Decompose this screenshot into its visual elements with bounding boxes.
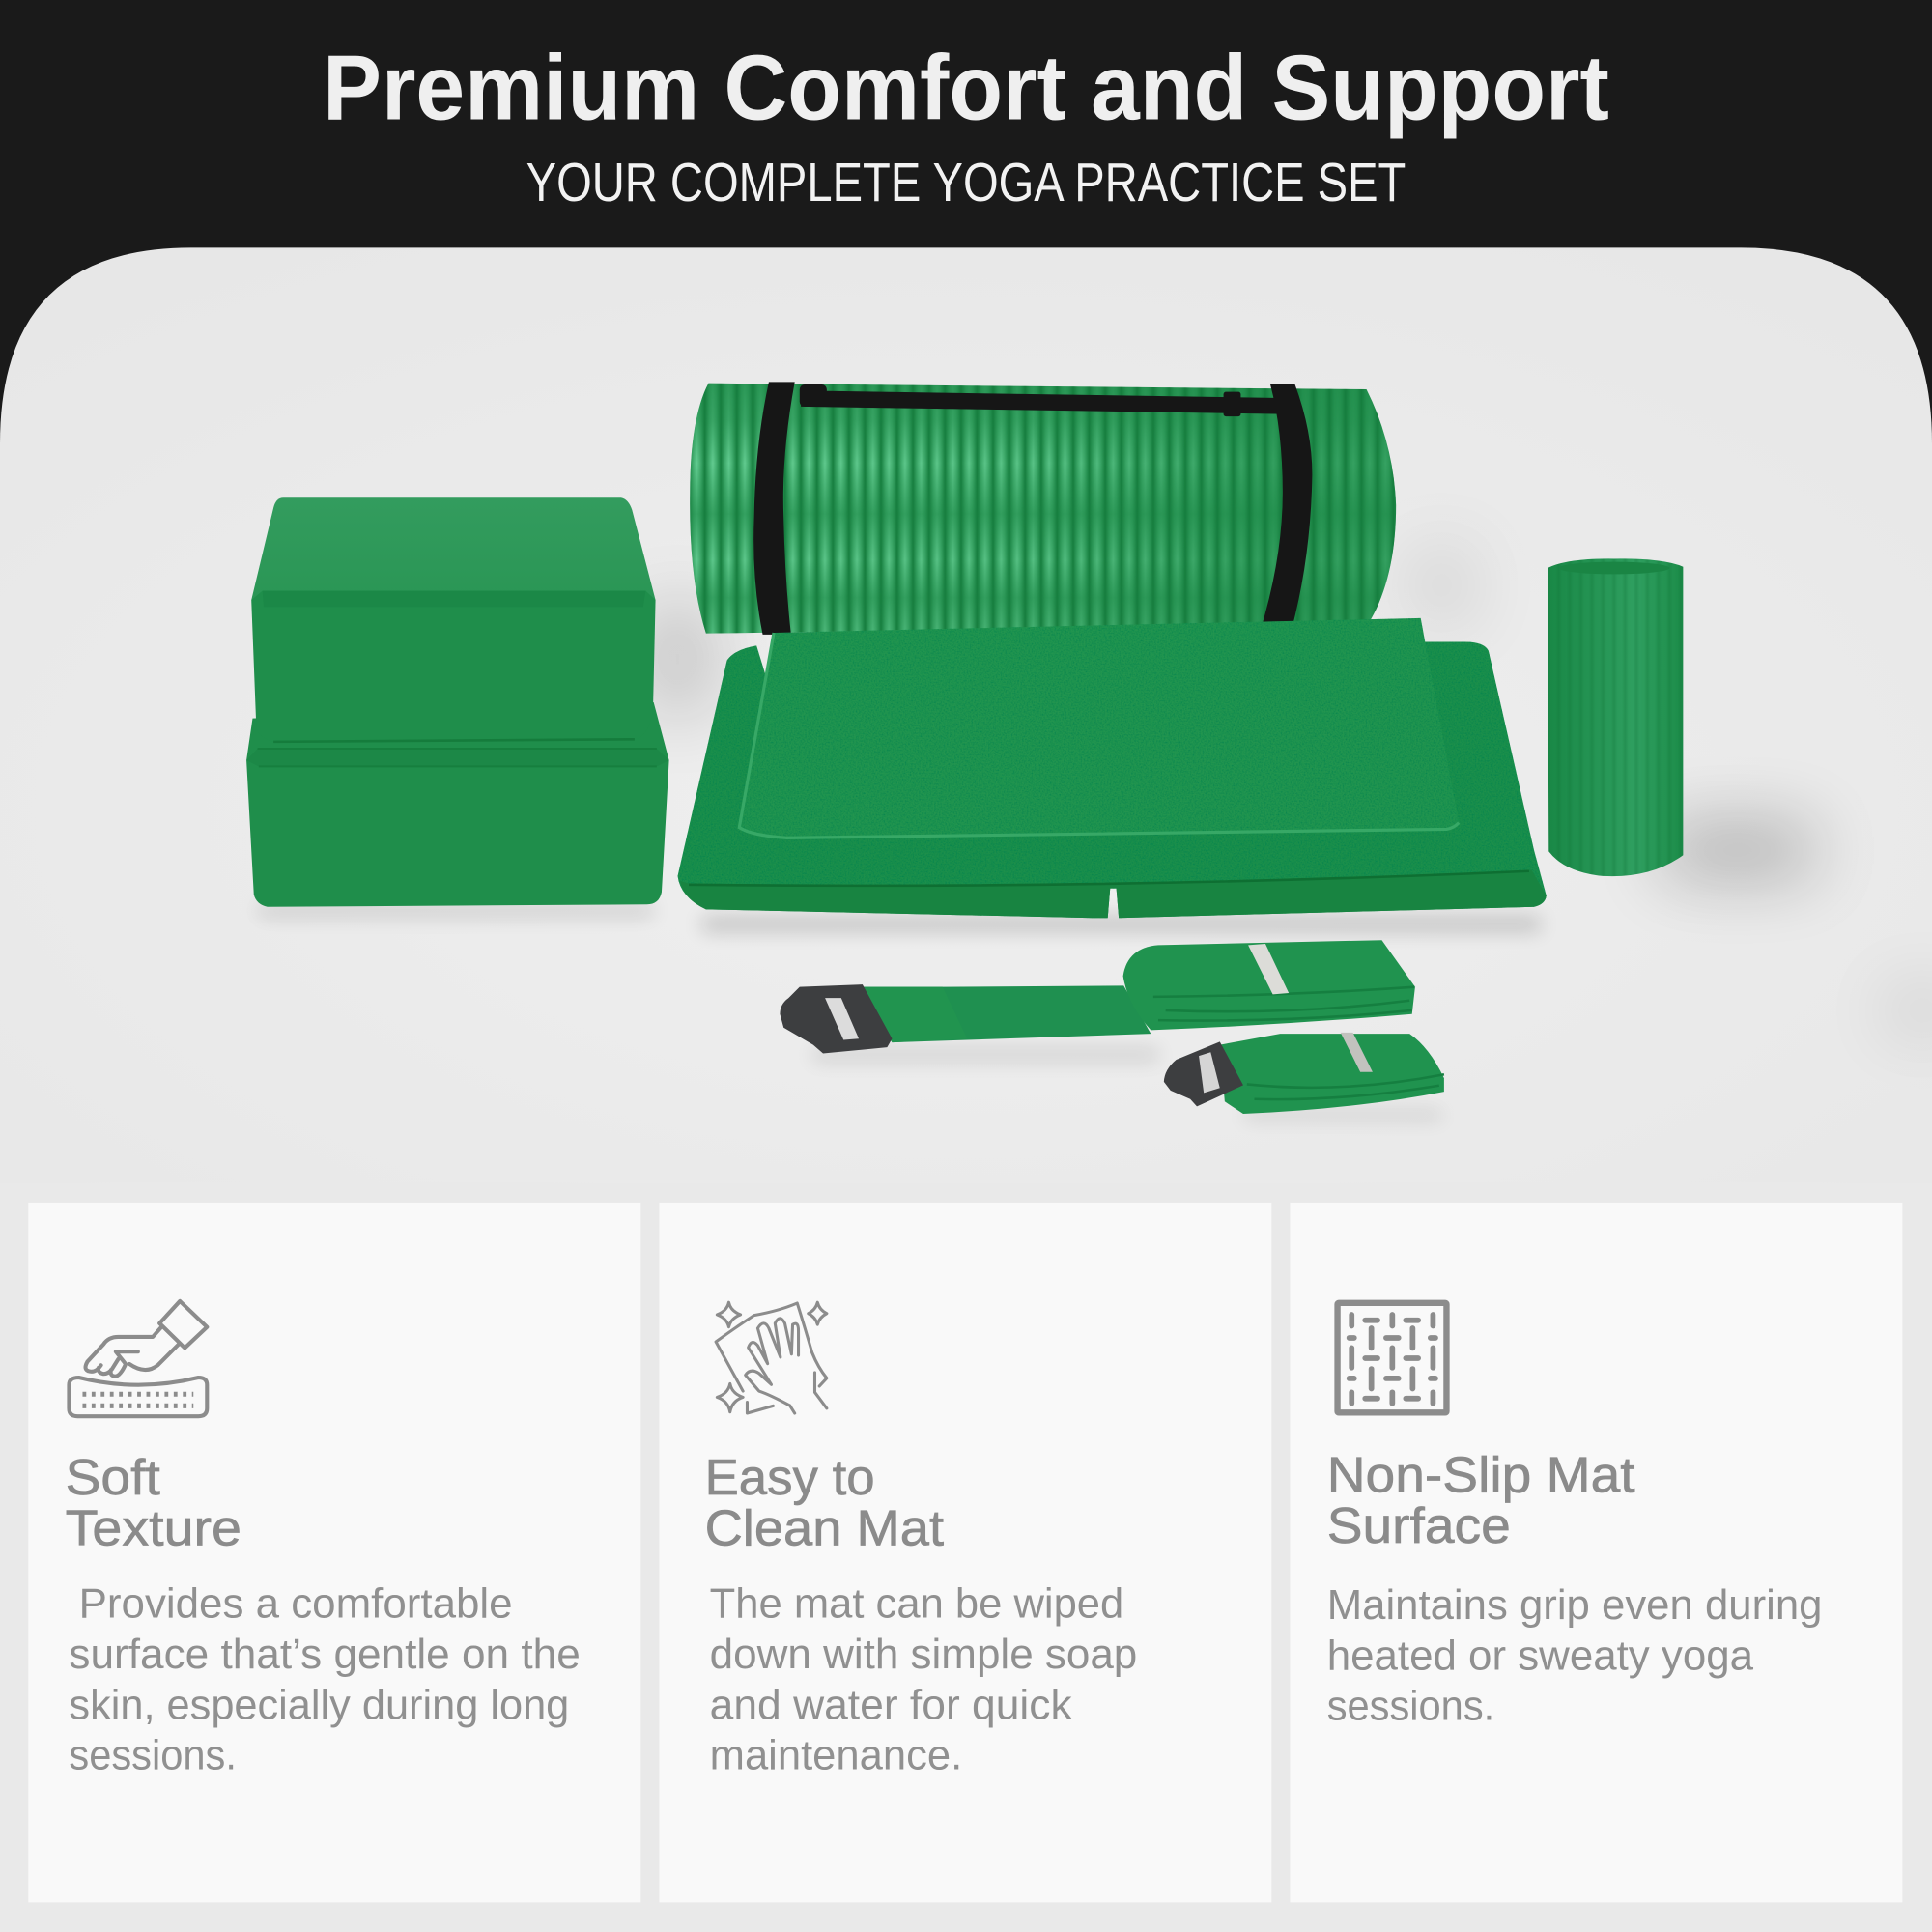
shadows: [259, 542, 1932, 1119]
body text: The mat can be wiped: [710, 1581, 1123, 1628]
buckle: [780, 984, 892, 1054]
title: Premium Comfort and Support: [323, 37, 1609, 140]
panel: non-slip surface: [1290, 1203, 1902, 1902]
body text: heated or sweaty yoga: [1327, 1633, 1754, 1679]
body text: Maintains grip even during: [1327, 1582, 1822, 1629]
lower yoga block: [246, 702, 669, 907]
header band: [0, 0, 1932, 443]
panel: soft texture: [28, 1203, 640, 1902]
body text: [1327, 1582, 1822, 1730]
panel: easy to clean: [659, 1203, 1271, 1902]
heading: [705, 1450, 945, 1556]
body text: skin, especially during long: [69, 1682, 569, 1728]
foam roller: [1548, 558, 1683, 876]
heading: [66, 1450, 242, 1556]
body text: [710, 1581, 1137, 1779]
small folded towel: [739, 618, 1459, 838]
heading: Texture: [66, 1500, 242, 1556]
heading: Surface: [1327, 1498, 1511, 1554]
large folded towel: [678, 642, 1547, 918]
body text: maintenance.: [710, 1733, 962, 1779]
black mat straps: [753, 382, 1312, 635]
icon: hand wiping with cloth: [716, 1302, 827, 1413]
body text: down with simple soap: [710, 1632, 1137, 1678]
heading: Non-Slip Mat: [1327, 1448, 1635, 1504]
body text: sessions.: [69, 1733, 237, 1779]
body text: sessions.: [1327, 1684, 1494, 1730]
body text: surface that’s gentle on the: [69, 1632, 581, 1678]
body text: [69, 1581, 581, 1779]
icon: hand pressing cushion: [69, 1301, 207, 1416]
heading: [1327, 1448, 1635, 1554]
heading: Easy to: [705, 1450, 875, 1506]
short strap with buckle: [1164, 1033, 1444, 1114]
product group: yoga set: [246, 376, 1932, 1119]
heading: Soft: [66, 1450, 160, 1506]
buckle: [1164, 1041, 1243, 1106]
body text: Provides a comfortable: [79, 1581, 513, 1628]
product panel: [0, 247, 1932, 1182]
long strap with buckle: [780, 940, 1415, 1054]
upper yoga block: [251, 497, 656, 742]
icon: non-slip pattern: [1338, 1303, 1446, 1412]
subtitle: YOUR COMPLETE YOGA PRACTICE SET: [526, 152, 1406, 213]
heading: Clean Mat: [705, 1500, 945, 1556]
rolled mat: [684, 376, 1405, 640]
body text: and water for quick: [710, 1682, 1072, 1728]
